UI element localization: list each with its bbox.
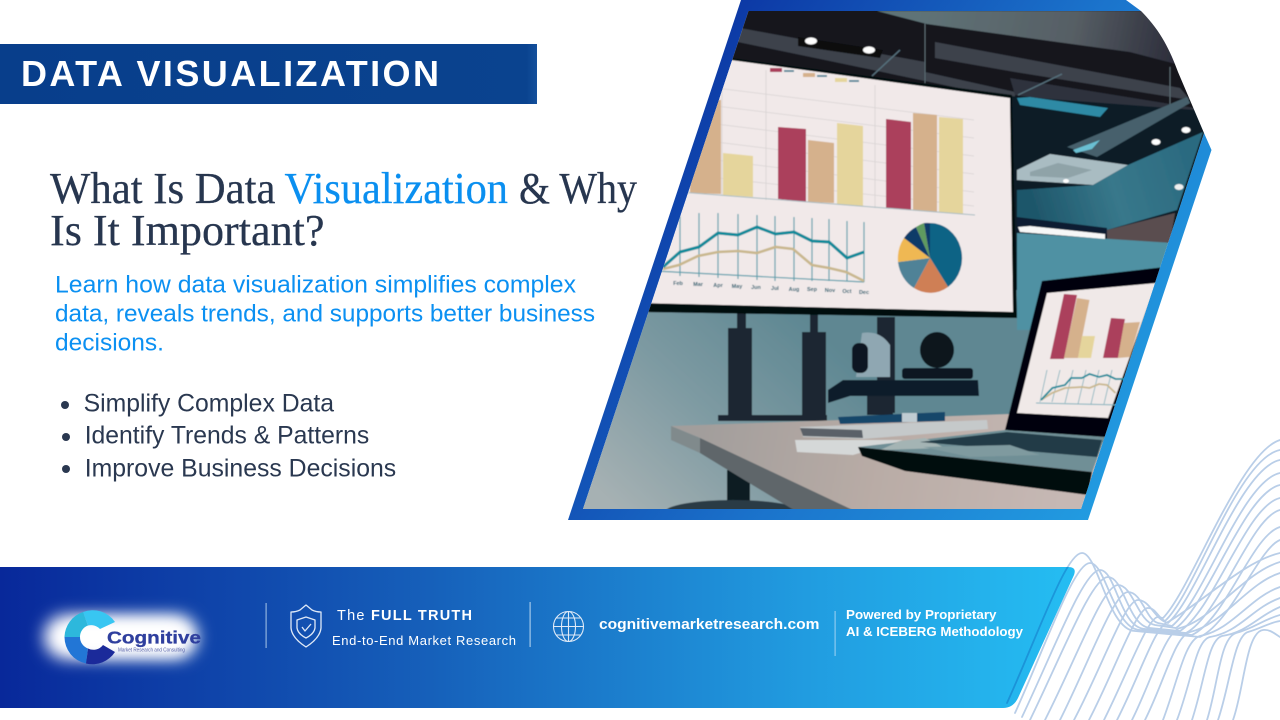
heading <box>50 164 637 255</box>
intro paragraph <box>55 272 595 357</box>
month axis labels: Nov <box>825 288 836 294</box>
photo frame <box>568 0 1212 520</box>
intro paragraph: data, reveals trends, and supports better business <box>55 301 595 328</box>
month axis labels: Oct <box>842 289 852 295</box>
footer band <box>0 567 1075 708</box>
intro paragraph: decisions. <box>55 330 164 357</box>
heading: & Why <box>519 164 637 213</box>
bullet list: Identify Trends & Patterns <box>85 422 369 450</box>
notebooks and pen <box>795 412 988 455</box>
monitor stands and camera <box>665 313 979 524</box>
methodology note <box>846 607 1024 639</box>
methodology note: AI & ICEBERG Methodology <box>846 624 1024 639</box>
logo <box>44 610 201 664</box>
bar chart on monitor <box>680 68 975 215</box>
intro paragraph: Learn how data visualization simplifies complex <box>55 272 576 299</box>
heading: Visualization <box>284 164 508 213</box>
divider <box>266 603 267 648</box>
month axis labels: Jul <box>771 286 779 292</box>
line chart on monitor <box>655 213 864 282</box>
month axis labels: Sep <box>807 287 818 293</box>
month axis labels: Feb <box>673 281 684 287</box>
logo: Market Research and Consulting <box>118 648 185 654</box>
website: cognitivemarketresearch.com <box>599 616 820 633</box>
title banner: DATA VISUALIZATION <box>21 53 439 94</box>
methodology note: Powered by Proprietary <box>846 607 997 622</box>
back wall and room <box>1010 96 1210 330</box>
monitor grid lines <box>700 70 974 208</box>
icon: globe <box>554 612 584 642</box>
heading: Is It Important? <box>50 206 324 255</box>
tagline <box>332 608 516 648</box>
desk <box>670 413 1103 509</box>
decorative wave lines <box>1007 440 1280 720</box>
large monitor <box>640 56 1017 318</box>
month axis labels: Jun <box>751 285 762 291</box>
bullet list: Simplify Complex Data <box>84 390 334 418</box>
bullet list <box>61 390 396 483</box>
laptop line chart <box>1036 370 1124 405</box>
month axis labels: Aug <box>789 287 799 293</box>
heading: What Is Data <box>50 164 276 213</box>
logo: Cognitive <box>107 628 201 648</box>
tagline: End-to-End Market Research <box>332 633 516 648</box>
month axis labels: Dec <box>859 290 869 296</box>
bullet list: Improve Business Decisions <box>85 455 396 483</box>
photo: office with screen and laptop <box>583 11 1204 509</box>
month axis labels: Apr <box>713 283 724 289</box>
tagline: The FULL TRUTH <box>337 608 472 624</box>
laptop <box>858 267 1165 495</box>
icon: shield <box>291 605 321 647</box>
divider <box>530 602 531 647</box>
pie chart on monitor <box>898 223 962 293</box>
month axis labels: May <box>732 284 743 290</box>
divider <box>834 611 836 656</box>
month axis labels: Mar <box>693 282 704 288</box>
laptop bar chart <box>1050 294 1140 359</box>
ceiling <box>700 0 1220 217</box>
title banner <box>0 44 537 104</box>
month axis labels <box>673 281 869 296</box>
